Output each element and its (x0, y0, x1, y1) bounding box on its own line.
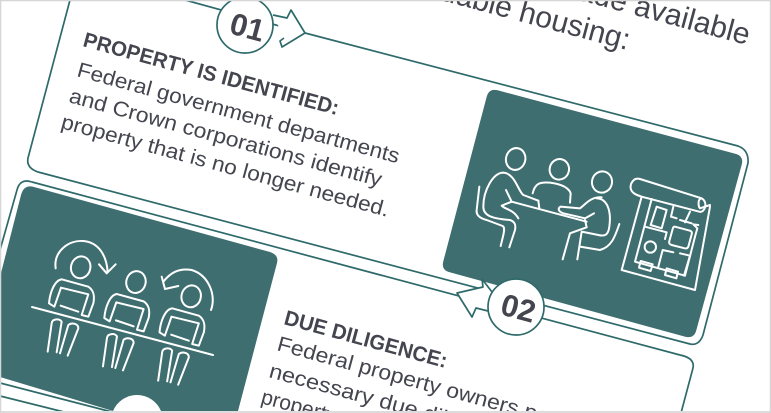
text: step 2 description (259, 307, 604, 413)
icon: person one at table (48, 241, 116, 356)
bottom edge of the frame, masks overflowing text (0, 411, 771, 413)
text: step 2 description: DUE DILIGENCE: (282, 307, 450, 373)
icon: person three at table (158, 283, 204, 385)
text: step 1 description (59, 29, 402, 222)
panel: step 1 image (443, 90, 742, 337)
icon: people meeting at a table (477, 146, 619, 259)
panel: step 3 card top outline (0, 383, 112, 413)
text: step 1 description: and Crown corporations identify (67, 85, 385, 192)
arrow: step 1 to 2 (273, 10, 305, 47)
icon: person two at table (103, 269, 149, 370)
badge: 02: 02 (497, 287, 540, 330)
badge: 01 (217, 0, 273, 53)
text: step 1 description: property that is no longer needed. (59, 111, 392, 222)
badge: 03 circle (113, 395, 161, 411)
icon: building floor plan (622, 179, 710, 290)
text: step 1 description: PROPERTY IS IDENTIFIED: (81, 29, 341, 120)
icon: returning arrow (162, 269, 213, 310)
arrow: step 2 to 3 (457, 279, 492, 317)
text: step 1 description: Federal government departments (75, 59, 402, 168)
badge: 02 (488, 279, 544, 335)
badge: 01: 01 (226, 6, 269, 49)
table line (32, 307, 213, 355)
panel: step 2 card outline (0, 181, 693, 413)
panel: step 1 card outline (28, 0, 748, 344)
panel: step 2 image (0, 186, 277, 411)
